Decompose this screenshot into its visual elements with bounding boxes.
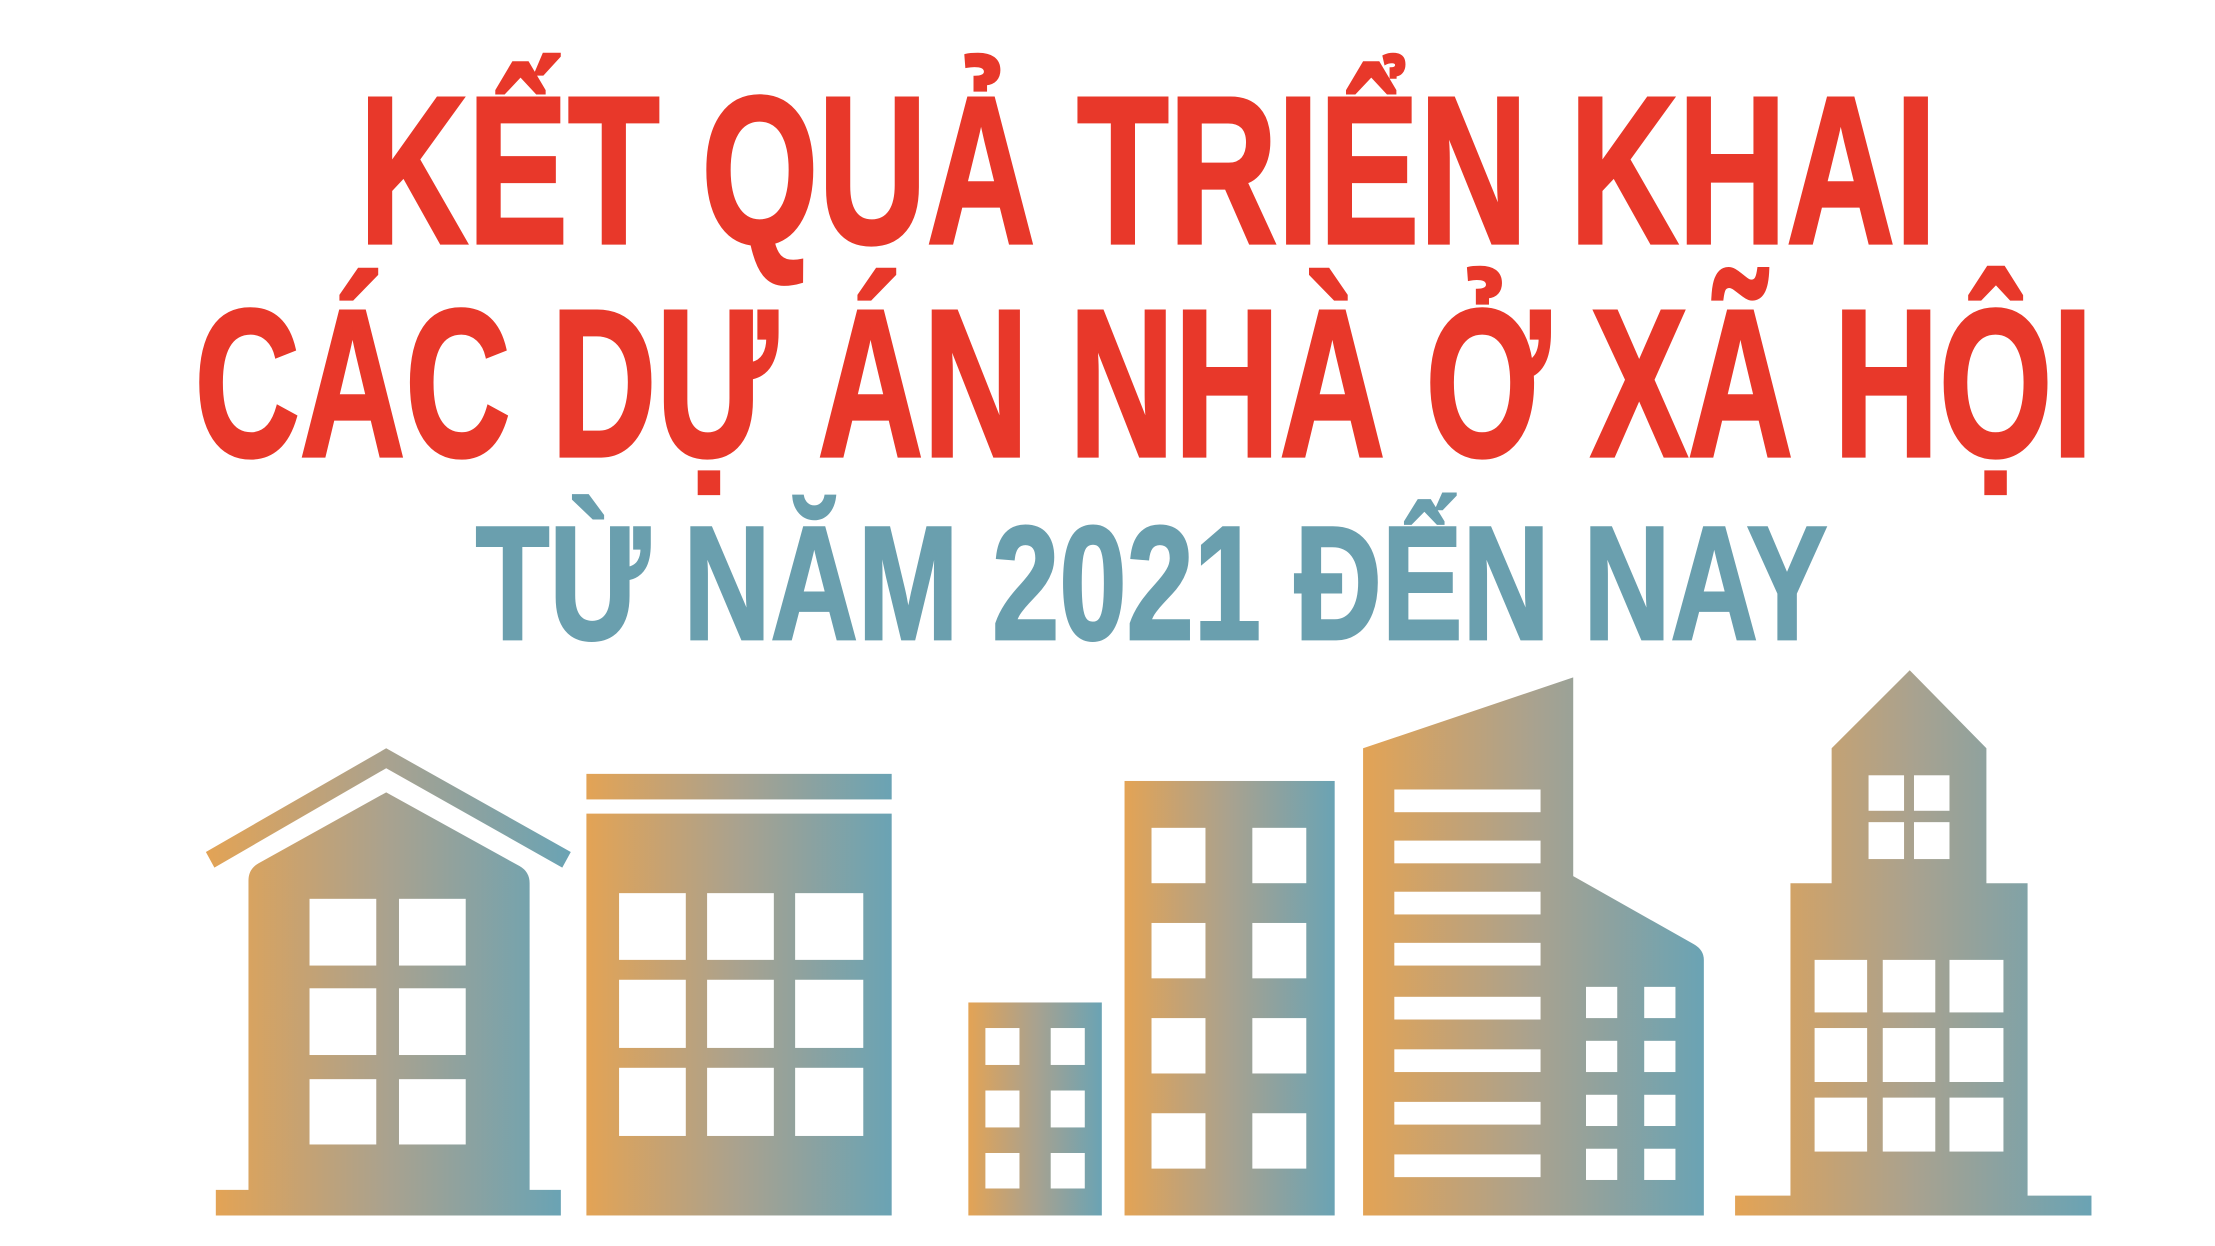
building 4 <box>1125 781 1335 1215</box>
building 6 <box>1735 670 2091 1215</box>
building 5 <box>1363 677 1704 1215</box>
building 3 <box>968 1002 1102 1215</box>
building 1: house <box>206 748 571 1215</box>
building 2 <box>586 774 892 1215</box>
